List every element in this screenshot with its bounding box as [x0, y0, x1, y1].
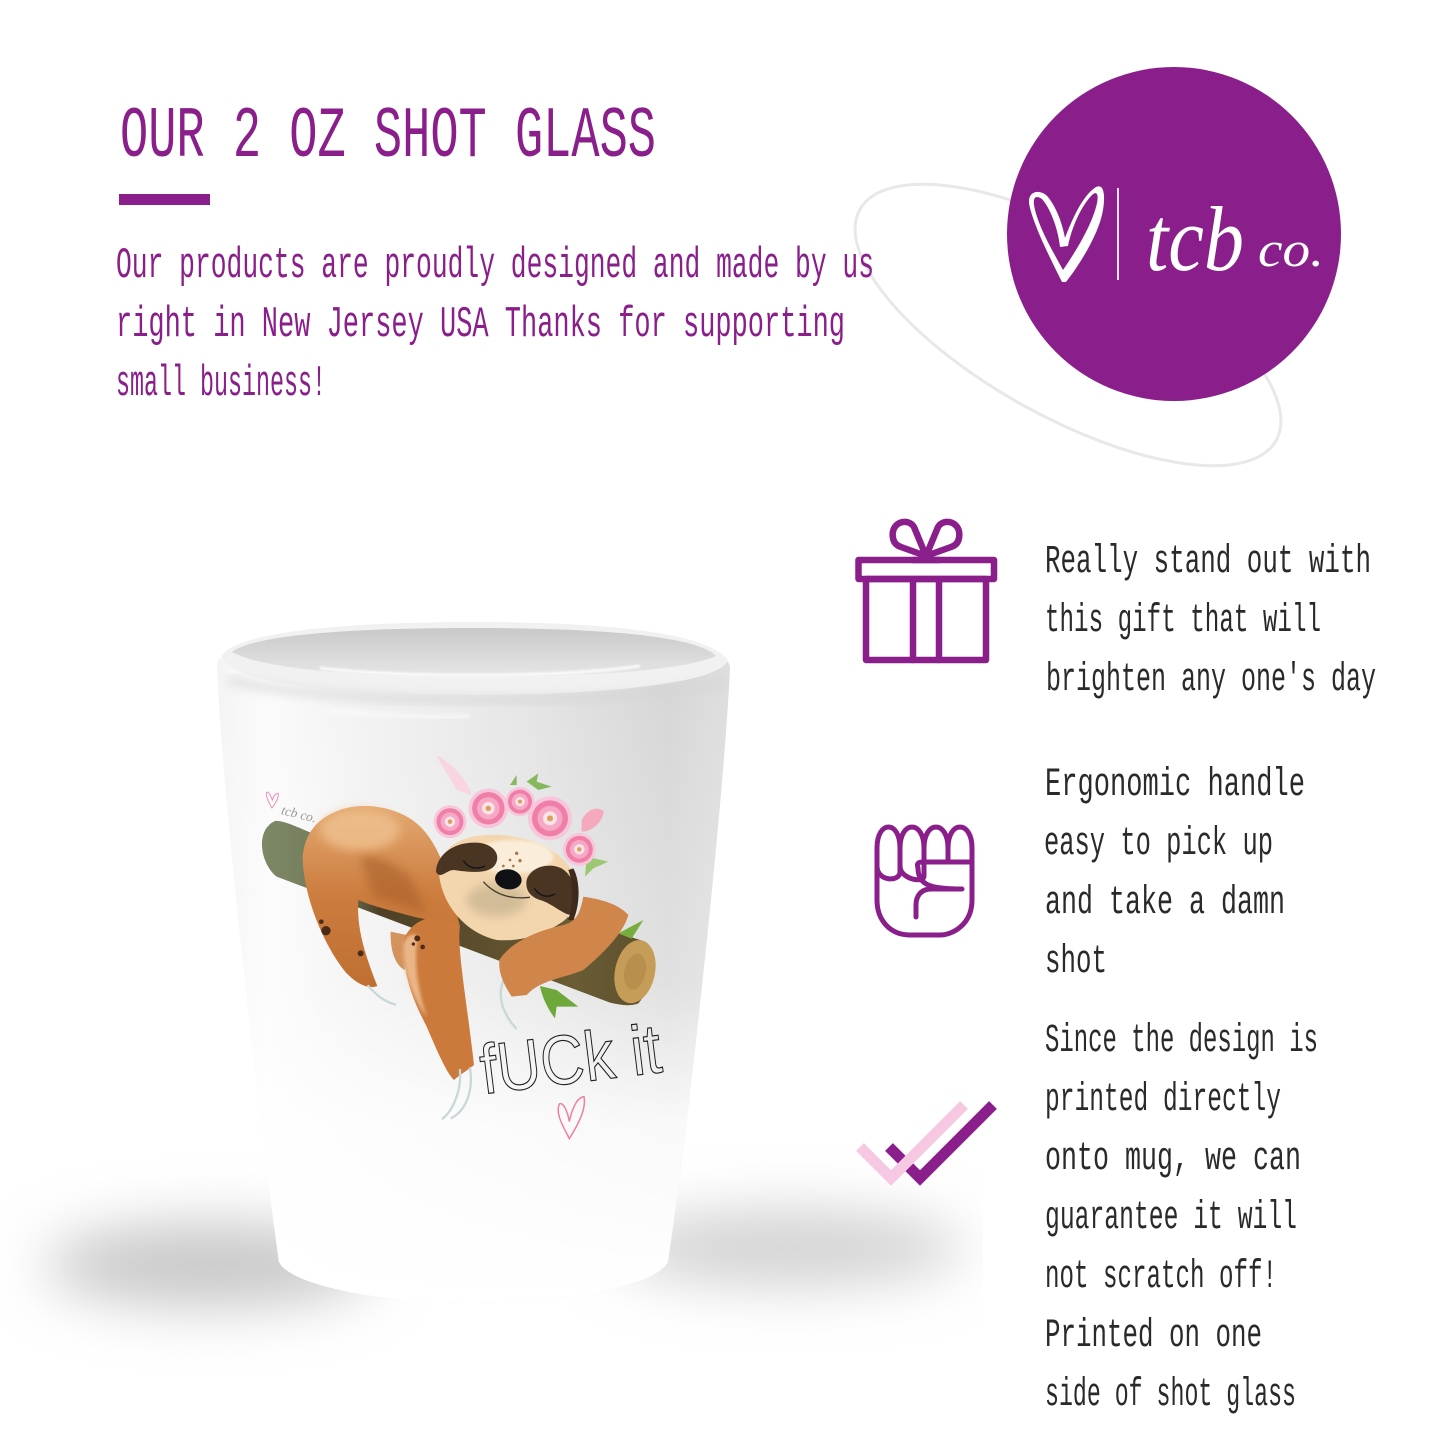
glass interior	[232, 628, 716, 677]
logo badge	[1007, 67, 1341, 401]
text: handle benefit: easy to pick up	[1044, 822, 1273, 867]
glass body	[217, 622, 730, 1303]
intro paragraph: right in New Jersey USA Thanks for supporting	[116, 300, 845, 350]
title: OUR 2 OZ SHOT GLASS	[120, 96, 656, 178]
text: gift benefit	[1045, 540, 1376, 703]
icon: logo heart	[1029, 186, 1104, 282]
pink heart	[558, 1097, 584, 1139]
logo wordmark: tcb	[1146, 188, 1244, 290]
body and back limb	[303, 806, 460, 987]
feature 1: gift	[858, 522, 1376, 703]
intro paragraph: small business!	[116, 359, 326, 409]
cut branch end	[609, 936, 661, 1007]
smile	[483, 882, 530, 898]
closed eyes	[463, 861, 555, 896]
sloth illustration	[262, 755, 665, 1139]
eye patches	[436, 843, 497, 875]
intro paragraph: Our products are proudly designed and made by us	[116, 241, 874, 291]
text: print benefit: printed directly	[1045, 1078, 1281, 1123]
branch	[262, 821, 652, 1005]
forehead freckles	[502, 852, 522, 867]
claws	[368, 975, 516, 1119]
nose	[494, 868, 523, 891]
text: print benefit: not scratch off!	[1045, 1255, 1277, 1300]
leaves under branch	[540, 986, 578, 1018]
small printed logo: tcb co.	[280, 802, 318, 826]
shot glass photo	[45, 622, 965, 1307]
text: print benefit	[1045, 1019, 1318, 1418]
small printed logo	[266, 792, 318, 826]
flower crown	[434, 755, 608, 877]
text: print benefit: onto mug, we can	[1045, 1137, 1301, 1182]
intro paragraph	[116, 241, 874, 409]
logo wordmark: co.	[1258, 221, 1324, 277]
ground shadow	[45, 1210, 965, 1307]
logo divider	[1117, 188, 1119, 280]
logo wordmark	[1146, 188, 1324, 290]
feature 2: handle	[877, 763, 1305, 985]
text: handle benefit: and take a damn	[1045, 881, 1285, 926]
rim highlight	[320, 666, 640, 675]
fur light patch	[320, 809, 400, 851]
front hanging arm	[403, 917, 474, 1080]
rim	[222, 622, 728, 695]
head	[439, 835, 576, 940]
far hanging leg	[391, 932, 407, 970]
text: print benefit: guarantee it will	[1045, 1196, 1297, 1241]
front arm hugging branch	[499, 897, 628, 997]
icon: raised fist	[877, 827, 972, 935]
text: handle benefit	[1044, 763, 1305, 985]
text: handle benefit: shot	[1045, 940, 1107, 985]
heading accent bar	[119, 194, 210, 205]
hand lettered slogan: fUCk it	[476, 1009, 665, 1109]
cheek shading	[467, 883, 527, 917]
icon: gift box	[858, 522, 994, 660]
text: print benefit: Printed on one	[1045, 1314, 1262, 1359]
paw spots	[319, 912, 620, 956]
feature 3: print quality	[860, 1019, 1318, 1418]
icon: double check mark	[860, 1105, 993, 1178]
text: handle benefit: Ergonomic handle	[1045, 763, 1305, 808]
decorative orbit ellipse behind logo	[815, 129, 1321, 521]
